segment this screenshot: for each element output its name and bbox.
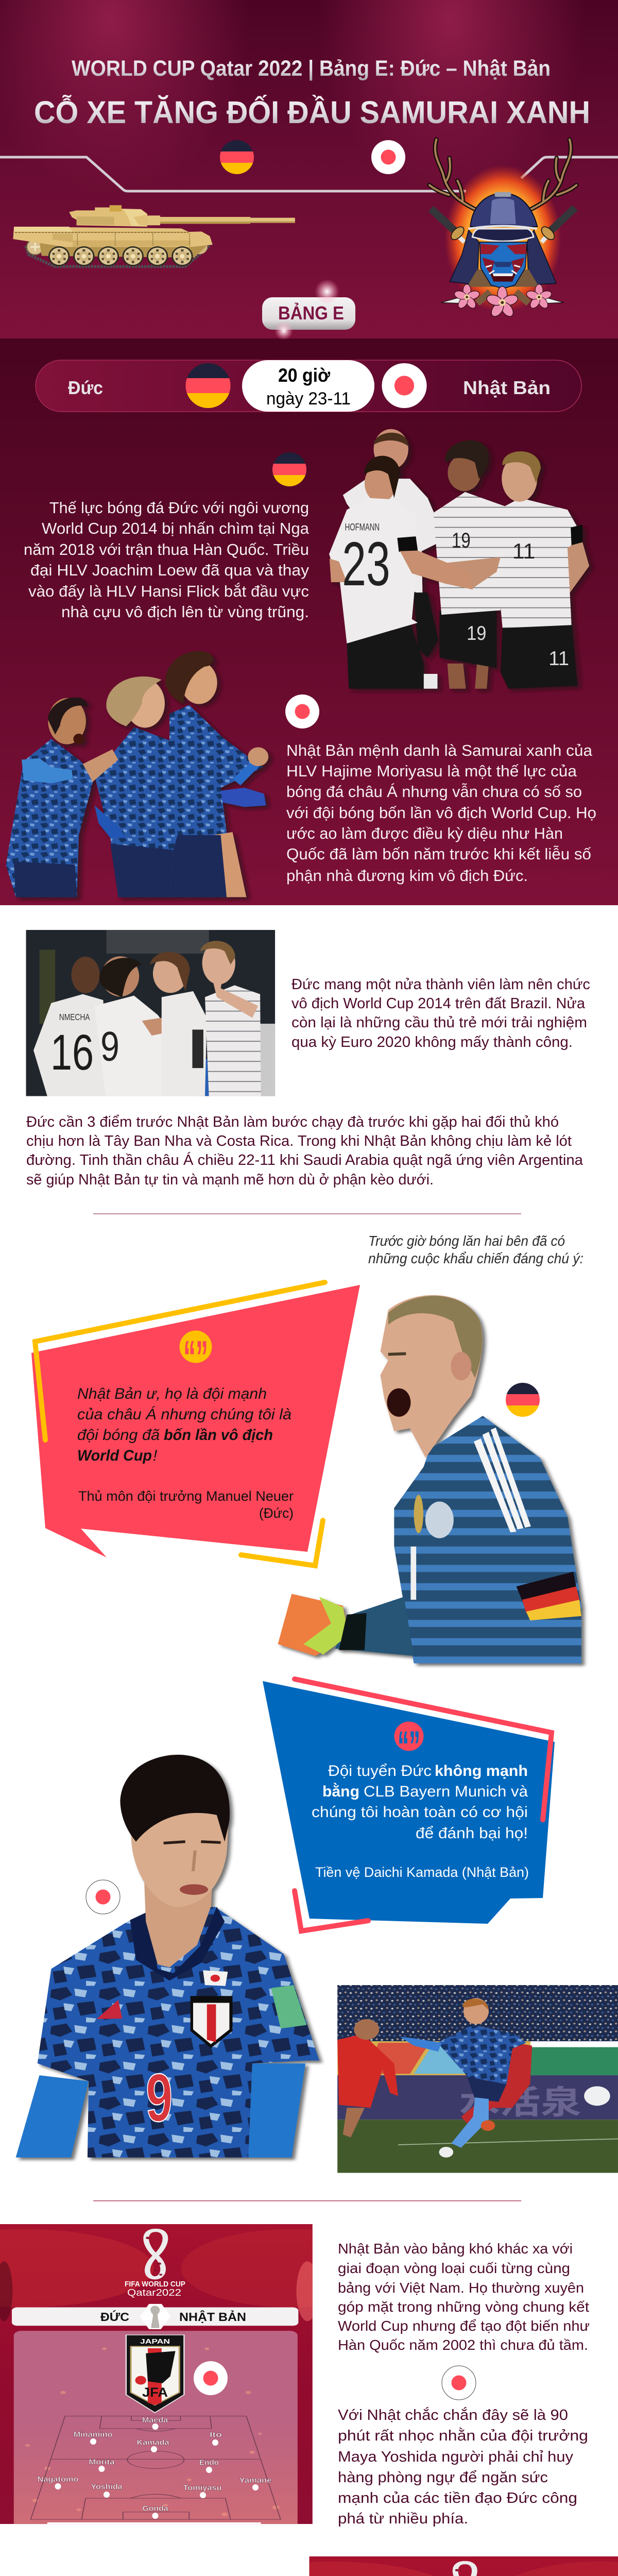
kicker title: WORLD CUP Qatar 2022 | Bảng E: Đức – Nhật Bản xyxy=(72,56,551,81)
text: Japan defence note: phút rất nhọc nhằn của đội trưởng xyxy=(338,2427,588,2444)
player 19: 19 xyxy=(467,621,486,644)
shirt xyxy=(38,1907,319,2158)
emblem caption: FIFA WORLD CUP xyxy=(125,2280,185,2289)
flag: Germany intro xyxy=(272,452,306,486)
quote text: ! xyxy=(153,1447,158,1464)
flag: Japan header xyxy=(371,140,405,174)
emblem caption: Qatar2022 xyxy=(127,2287,181,2298)
player 23: 23 xyxy=(342,529,390,599)
text: match context: đường. Tinh thần châu Á chiều 22-11 khi Saudi Arabia quật ngã ứng viên Argentina xyxy=(26,1151,583,1168)
player names: Yamane xyxy=(239,2476,272,2485)
background player xyxy=(461,2040,532,2126)
sponsor board: 水活泉 xyxy=(459,2084,581,2121)
attribution: Thủ môn đội trưởng Manuel Neuer xyxy=(78,1488,294,1504)
photo: Kamada: 9 xyxy=(146,2059,173,2136)
photo: Japan team xyxy=(6,651,268,897)
text: Japan group note: giai đoạn vòng loại cuối từng cùng xyxy=(338,2260,570,2276)
quote bubble: Neuer xyxy=(31,1282,360,1566)
text: match context xyxy=(26,1114,583,1188)
text: Japan group note: bảng với Việt Nam. Họ thường xuyên xyxy=(338,2280,584,2296)
player names: Kamada xyxy=(137,2438,169,2447)
header bottom band background xyxy=(0,338,618,905)
text: match context: Đức cần 3 điểm trước Nhật Bản làm bước chạy đà trước khi gặp hai đối thủ khó xyxy=(26,1114,559,1130)
photo: Kamada xyxy=(16,1755,319,2158)
head xyxy=(381,1295,483,1458)
text: Japan group note xyxy=(338,2241,590,2353)
photo: German players celebrating xyxy=(26,930,275,1096)
text: German team intro: năm 2018 với trận thua Hàn Quốc. Triều xyxy=(24,540,309,558)
text: Japan group note: góp mặt trong những vòng chung kết xyxy=(338,2299,589,2315)
text: Japan defence note: phá từ nhiều phía. xyxy=(338,2511,468,2527)
armband xyxy=(517,1572,581,1620)
badge: Bảng E xyxy=(262,279,355,340)
quote text: Nhật Bản ư, họ là đội mạnh xyxy=(77,1385,267,1402)
kickoff time: ngày 23-11 xyxy=(266,389,351,409)
crest: Japan: JFA xyxy=(142,2385,168,2400)
ball xyxy=(584,2086,610,2106)
player 16 xyxy=(33,957,106,1096)
text: Japan team intro xyxy=(286,741,596,885)
player 11 xyxy=(443,451,589,689)
player 16: NMECHA xyxy=(59,1013,90,1022)
icon: quote: “” xyxy=(398,1723,420,1770)
text: Germany squad note: còn lại là những cầu thủ trẻ mới trải nghiệm xyxy=(291,1014,587,1031)
blue player xyxy=(400,1998,526,2158)
player names: Tomiyasu xyxy=(183,2483,221,2493)
right player xyxy=(162,651,268,897)
illustration: tank xyxy=(13,205,295,266)
text: pre-match words: những cuộc khẩu chiến đáng chú ý: xyxy=(368,1250,583,1266)
badge: Bảng E: BẢNG E xyxy=(278,302,344,324)
illustration: samurai mask xyxy=(430,140,576,319)
text: Japan team intro: phận nhà đương kim vô địch Đức. xyxy=(286,867,528,885)
player 23: HOFMANN xyxy=(345,521,380,533)
quote text: không mạnh xyxy=(435,1762,528,1780)
grass xyxy=(337,2120,618,2173)
poster: Germany lineup xyxy=(309,2556,618,2576)
text: Germany squad note: vô địch World Cup 2014 trên đất Brazil. Nửa xyxy=(291,995,586,1012)
player 19: 19 xyxy=(452,529,471,552)
attribution xyxy=(78,1488,294,1521)
text: Japan team intro: Nhật Bản mệnh danh là Samurai xanh của xyxy=(286,741,593,759)
player Kimmich xyxy=(200,941,261,1096)
text: Germany squad note: qua kỳ Euro 2020 không mấy thành công. xyxy=(291,1034,573,1050)
header section background xyxy=(0,0,618,339)
attribution: Tiền vệ Daichi Kamada (Nhật Bản) xyxy=(315,1865,529,1880)
player Volland xyxy=(99,956,162,1096)
player names: Maeda xyxy=(142,2416,168,2425)
text: German team intro: đại HLV Joachim Loew đã qua và thay xyxy=(30,561,310,579)
player names: Endo xyxy=(199,2459,219,2467)
text: Japan team intro: ước ao làm được điều kỳ diệu như Hàn xyxy=(286,824,563,842)
advert band xyxy=(337,2041,618,2075)
text: Japan defence note: Với Nhật chắc chắn đây sẽ là 90 xyxy=(338,2406,568,2424)
player names: Nagatomo xyxy=(37,2475,78,2484)
match labels: NHẬT BẢN xyxy=(179,2309,246,2324)
text: Japan team intro: HLV Hajime Moriyasu là một thế lực của xyxy=(286,762,577,780)
flag: Japan intro xyxy=(285,694,319,728)
flag: Germany header xyxy=(220,140,254,174)
player Müller xyxy=(150,952,207,1096)
header line decoration xyxy=(0,157,618,191)
player Volland: 9 xyxy=(100,1024,119,1070)
flag: Japan Kamada xyxy=(86,1880,120,1914)
player 23 xyxy=(329,456,473,689)
flag: Germany xyxy=(185,363,231,408)
left player xyxy=(6,698,118,897)
player 16: 16 xyxy=(50,1025,94,1080)
text: Germany squad note: Đức mang một nửa thành viên làm nên chức xyxy=(291,976,590,993)
attribution: (Đức) xyxy=(259,1505,294,1521)
flag: Germany Neuer xyxy=(506,1383,540,1417)
text: pre-match words: Trước giờ bóng lăn hai bên đã có xyxy=(368,1233,565,1249)
quote text: bằng xyxy=(322,1783,359,1800)
quote text xyxy=(77,1385,291,1464)
text: German team intro: vào đấy là HLV Hansi Flick bắt đầu vực xyxy=(28,582,309,600)
player names: Ito xyxy=(210,2431,222,2439)
text: German team intro: Thế lực bóng đá Đức với ngôi vương xyxy=(49,499,309,517)
match labels xyxy=(100,2309,246,2324)
back player xyxy=(343,429,445,689)
quote text: Đội tuyển Đức xyxy=(328,1762,432,1780)
quote text: bốn lần vô địch xyxy=(164,1427,273,1444)
text: Japan defence note xyxy=(338,2406,588,2527)
photo: Japanese striker xyxy=(337,1985,618,2173)
player names: Yoshida xyxy=(91,2482,123,2492)
quote text: đội bóng đã xyxy=(77,1427,160,1444)
flag: Japan side xyxy=(442,2366,476,2400)
icon: quote xyxy=(179,1330,212,1383)
text: Japan team intro: bóng đá châu Á nhưng vẫn chưa có số so xyxy=(286,783,582,801)
text: Germany squad note xyxy=(291,976,590,1050)
text: German team intro: nhà cựu vô địch lên từ vùng trũng. xyxy=(61,603,309,621)
sleeve xyxy=(335,1597,414,1656)
quote bubble: Kamada xyxy=(263,1679,555,1931)
collar xyxy=(130,1907,225,1980)
crest: Japan xyxy=(126,2335,184,2413)
quote text: để đánh bại họ! xyxy=(416,1825,528,1842)
text: German team intro: World Cup 2014 bị nhấn chìm tại Nga xyxy=(42,519,310,537)
text: Japan defence note: Maya Yoshida người phải chỉ huy xyxy=(338,2449,574,2465)
player 11: 11 xyxy=(512,540,535,563)
text: Japan defence note: hàng phòng ngự để ngăn sức xyxy=(338,2469,548,2486)
text: German team intro xyxy=(24,499,310,621)
photo: German team xyxy=(329,429,589,689)
shirt xyxy=(394,1416,581,1664)
crest xyxy=(191,1996,233,2048)
text: Japan defence note: mạnh của các tiền đạo Đức công xyxy=(338,2490,577,2506)
arms xyxy=(16,2063,305,2158)
match labels: ĐỨC xyxy=(100,2310,129,2324)
flag: Japan poster xyxy=(194,2361,228,2395)
main title: CỖ XE TĂNG ĐỐI ĐẦU SAMURAI XANH xyxy=(34,95,590,130)
text: pre-match words xyxy=(368,1233,583,1266)
player names: Minamino xyxy=(74,2430,113,2439)
quote text: World Cup xyxy=(77,1447,152,1464)
icon: quote xyxy=(394,1722,423,1770)
text: Japan group note: Nhật Bản vào bảng khó khác xa với xyxy=(338,2241,573,2257)
flag: Japan xyxy=(382,363,427,408)
player 19 xyxy=(434,440,506,689)
team: Đức: Đức xyxy=(68,377,103,398)
text: Japan team intro: với đội bóng bốn lần vô địch World Cup. Họ xyxy=(286,804,596,822)
quote text: của châu Á nhưng chúng tôi là xyxy=(77,1406,291,1423)
red player xyxy=(337,2019,398,2138)
text: match context: sẽ giúp Nhật Bản tự tin và mạnh mẽ hơn dù ở phận kèo dưới. xyxy=(26,1172,434,1188)
sponsor board xyxy=(337,2075,618,2121)
player names: Gonda xyxy=(142,2504,168,2513)
icon: quote: “” xyxy=(183,1332,208,1383)
match bar xyxy=(36,360,581,412)
quote text: CLB Bayern Munich và xyxy=(364,1783,528,1800)
neck xyxy=(144,1871,213,1968)
head xyxy=(120,1755,230,1907)
kickoff time: 20 giờ xyxy=(278,365,331,386)
player names xyxy=(37,2416,272,2513)
stands xyxy=(337,1985,618,2041)
glove xyxy=(278,1594,367,1656)
middle player xyxy=(95,676,266,897)
text: Japan group note: Hàn Quốc năm 2002 thì chưa đủ tầm. xyxy=(338,2337,588,2353)
swords behind helmet xyxy=(431,208,575,303)
player dots xyxy=(55,2424,259,2519)
text: Japan team intro: Quốc đã làm bốn năm trước khi kết liễu số xyxy=(286,845,591,863)
quote text: chúng tôi hoàn toàn có cơ hội xyxy=(312,1804,528,1821)
emblem caption xyxy=(125,2280,185,2298)
team: Nhật Bản: Nhật Bản xyxy=(463,377,551,398)
quote text xyxy=(312,1762,528,1842)
text: Japan group note: World Cup nhưng để tạo đột biến như xyxy=(338,2318,590,2334)
kickoff time xyxy=(242,360,374,412)
poster: Japan lineup xyxy=(0,2224,402,2529)
player names: Morita xyxy=(89,2458,115,2467)
crest: Japan: JAPAN xyxy=(140,2337,170,2345)
photo: Neuer xyxy=(278,1295,581,1664)
player 11: 11 xyxy=(548,647,569,669)
text: match context: chịu hơn là Tây Ban Nha và Costa Rica. Trong khi Nhật Bản không chịu làm kẻ lót xyxy=(26,1133,572,1149)
